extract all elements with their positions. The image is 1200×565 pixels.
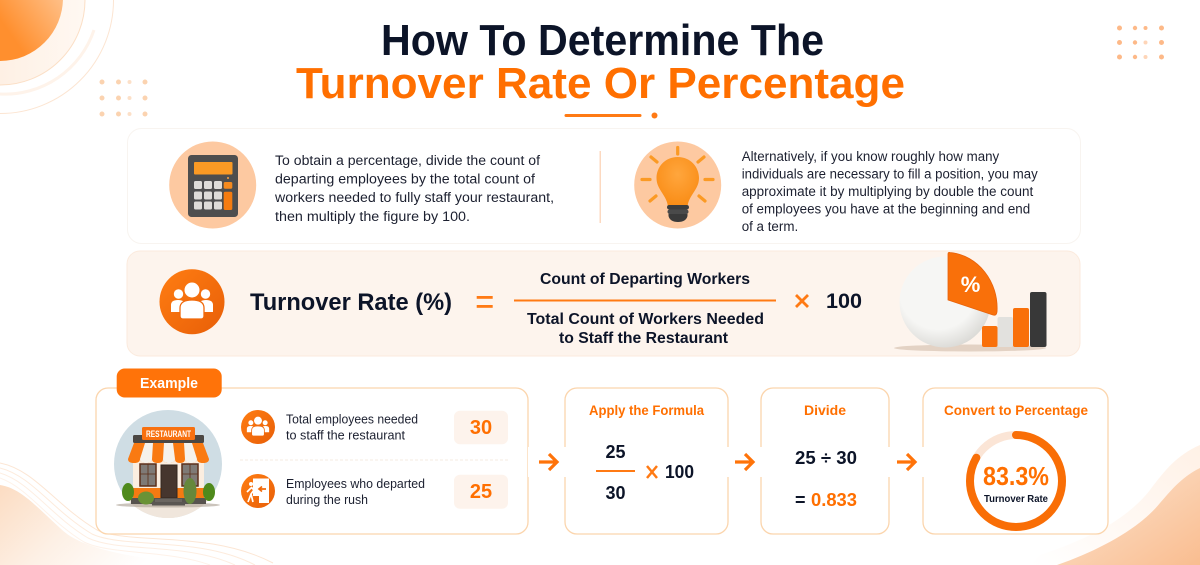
icon: person leaving through door (241, 474, 275, 508)
text: turnover rate label: Turnover Rate (%) (250, 289, 452, 316)
panel: divide: Divide (804, 402, 846, 418)
icon: equals sign (477, 296, 493, 308)
panel: example (96, 368, 528, 534)
example tab (117, 368, 222, 398)
fraction calculation: 100 (665, 462, 694, 482)
formula fraction: Total Count of Workers Needed (527, 311, 764, 328)
decoration: bottom-left wave (0, 463, 273, 565)
title (296, 16, 905, 108)
icon: calculator (169, 142, 256, 228)
formula fraction (514, 271, 776, 347)
fraction calculation: 25 (605, 442, 626, 462)
panel: divide (761, 388, 889, 534)
row: employees departed: during the rush (286, 493, 368, 507)
panel: explanations (128, 128, 1080, 244)
text: alternative explanation: of a term. (742, 219, 798, 234)
icon: restaurant storefront (114, 410, 222, 518)
decoration: top-left dots (100, 80, 148, 116)
panel: apply the formula (565, 388, 728, 534)
result: 0.833 (811, 490, 857, 510)
title underline (564, 112, 658, 118)
row: total employees needed: Total employees needed (286, 412, 418, 426)
arrow: to convert (887, 447, 925, 477)
title: How To Determine The (381, 16, 824, 65)
result: = (795, 490, 806, 510)
row: total employees needed (241, 410, 508, 444)
row: employees departed: 25 (470, 481, 492, 503)
text: percentage explanation (274, 153, 554, 224)
multiply by 100: 100 (826, 290, 862, 313)
row: employees departed (241, 474, 508, 509)
text: alternative explanation: of employees you have at the beginning and end (742, 202, 1030, 216)
panel: divide: 25 ÷ 30 (795, 448, 857, 468)
fraction calculation: 30 (605, 483, 626, 503)
arrow: to divide (726, 447, 763, 477)
text: percentage explanation: then multiply the figure by 100. (275, 209, 470, 224)
multiply by 100 (796, 290, 862, 313)
example tab: Example (140, 376, 198, 392)
panel: formula band (127, 251, 1080, 356)
text: alternative explanation (742, 149, 1038, 234)
text: percentage explanation: workers needed to fully staff your restaurant, (274, 190, 554, 205)
panel: convert to percentage (923, 388, 1108, 534)
icon: people (241, 410, 275, 444)
text: alternative explanation: Alternatively, if you know roughly how many (742, 149, 999, 164)
text: percentage explanation: To obtain a percentage, divide the count of (275, 153, 540, 168)
text: percentage explanation: departing employees by the total count of (275, 172, 535, 186)
title: Turnover Rate Or Percentage (296, 59, 905, 108)
fraction calculation (596, 442, 694, 503)
progress ring: 83.3% (983, 461, 1049, 491)
icon: people group (160, 269, 224, 334)
icon: pie and bar chart (894, 252, 1046, 352)
text: alternative explanation: individuals are necessary to fill a position, you may (742, 166, 1038, 182)
decoration: top-left circles (0, 0, 114, 114)
row: total employees needed: 30 (470, 417, 492, 439)
text: alternative explanation: approximate it by multiplying by double the count (742, 184, 1033, 199)
progress ring: Turnover Rate (984, 494, 1048, 505)
icon: pie and bar chart: % (961, 272, 980, 297)
formula fraction: Count of Departing Workers (540, 271, 750, 288)
icon: restaurant storefront: RESTAURANT (146, 429, 191, 439)
decoration: top-right dots (1117, 26, 1164, 60)
icon: light bulb (634, 142, 721, 228)
panel: convert to percentage: Convert to Percentage (944, 402, 1088, 418)
row: total employees needed: to staff the restaurant (286, 428, 406, 442)
decoration: bottom-right wave (1030, 445, 1200, 565)
row: employees departed: Employees who departed (286, 477, 425, 491)
formula fraction: to Staff the Restaurant (559, 330, 729, 347)
arrow: to apply formula (528, 447, 566, 477)
panel: apply the formula: Apply the Formula (589, 402, 704, 418)
progress ring (970, 435, 1062, 527)
